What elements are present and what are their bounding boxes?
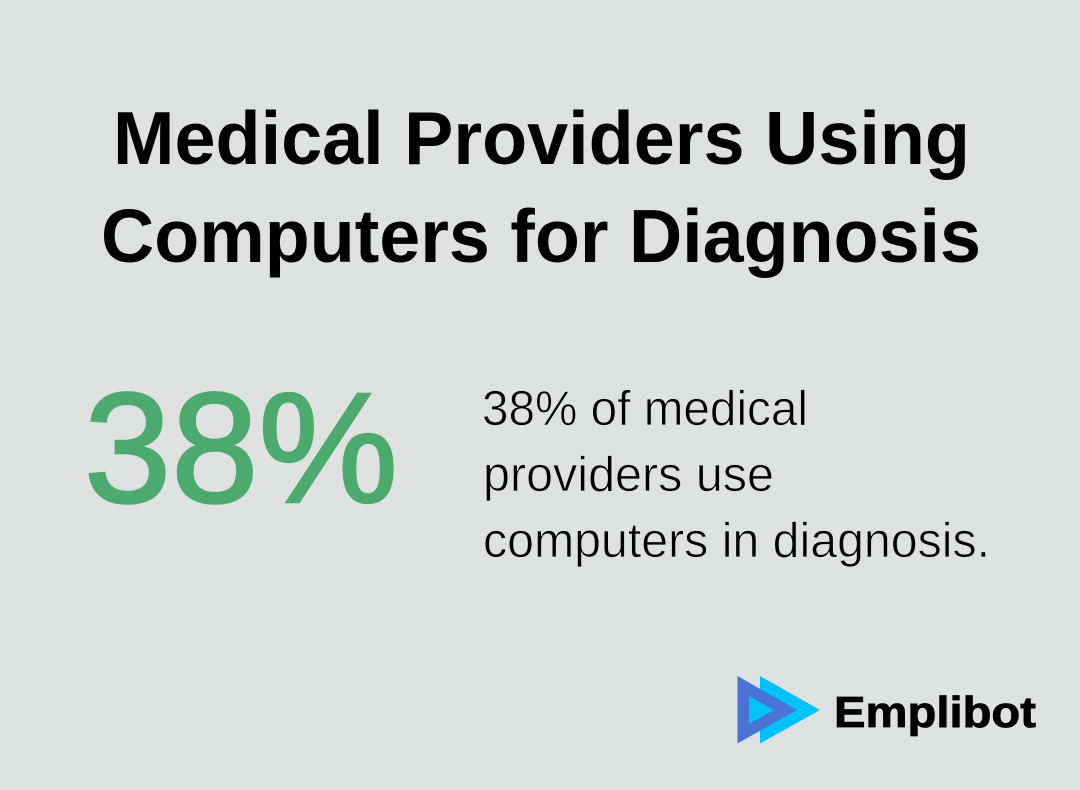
title: Computers for Diagnosis: [101, 194, 981, 278]
statistic description: [482, 382, 990, 568]
icon: play triangles: [738, 676, 820, 744]
big statistic: 38%: 38%: [84, 361, 398, 536]
statistic description: providers use: [483, 448, 774, 502]
statistic description: 38% of medical: [482, 382, 808, 436]
title: [101, 96, 981, 278]
logo: Emplibot: [738, 676, 1036, 744]
statistic description: computers in diagnosis.: [483, 514, 990, 568]
title: Medical Providers Using: [113, 96, 970, 180]
logo wordmark: Emplibot: [834, 688, 1036, 737]
